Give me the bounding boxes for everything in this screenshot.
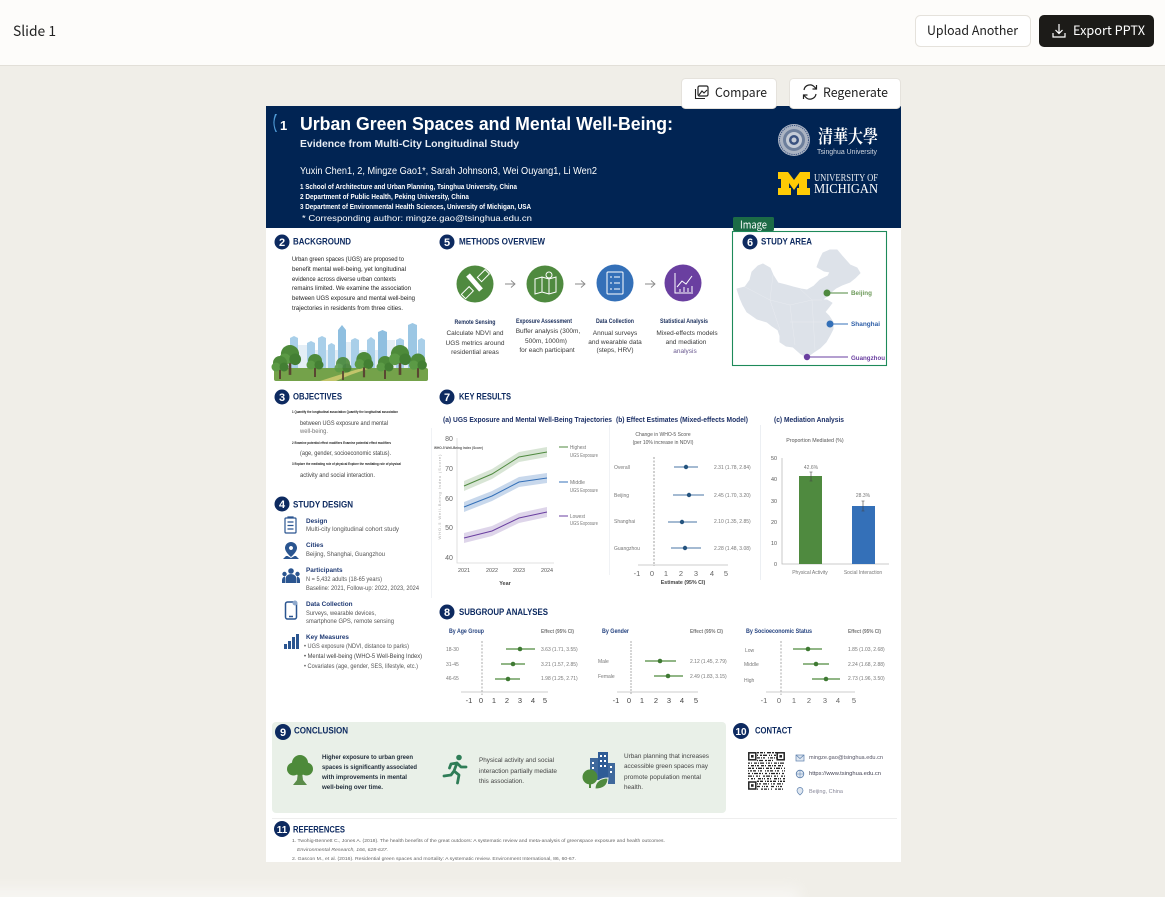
method: statistical analysis: analysis: [673, 348, 697, 355]
method: exposure assessment: Buffer analysis (300m,: [516, 328, 580, 335]
forest plot: by age group: 5: [543, 696, 547, 705]
method: statistical analysis: and mediation: [666, 339, 707, 346]
bar: physical activity: 42.6%: [804, 465, 819, 471]
forest plot: by gender: 2: [654, 696, 658, 705]
logo: Tsinghua University: [778, 123, 878, 156]
middle exposure line: [464, 473, 547, 512]
panel: subgroup analyses: [440, 604, 885, 705]
contact: email: mingze.gao@tsinghua.edu.cn: [809, 755, 883, 761]
forest plot: by age group: By Age Group: [449, 628, 484, 635]
forest plot: by gender: 2.12 (1.45, 2.79): [690, 659, 727, 665]
background text: between UGS exposure and mental well-being: [292, 295, 416, 302]
forest plot: by socioeconomic status: 1: [792, 696, 796, 705]
chart: effect estimates forest plot: 5: [724, 569, 728, 578]
forest plot: by age group: 3.63 (1.71, 3.55): [541, 647, 578, 653]
section 1 badge: 1: [280, 118, 287, 133]
conclusion: mediation: [479, 757, 558, 785]
forest row: Guangzhou: 2.28 (1.48, 3.08): [714, 546, 751, 552]
icon: map: [526, 266, 564, 302]
method: statistical analysis: Mixed-effects models: [656, 330, 718, 337]
forest row: Shanghai: [614, 519, 751, 525]
bar: social interaction: 28.3%: [856, 493, 871, 499]
reference list: 2. Gascon M., et al. (2016). Residential green spaces and mortality: A systematic review. Environment International, 86, 60-67.: [292, 856, 576, 862]
forest plot: by socioeconomic status: Low: [745, 648, 755, 654]
affiliations: [300, 182, 531, 211]
forest plot: by gender: Male: [598, 659, 609, 665]
chart: trajectories line chart: 2022: [486, 568, 498, 574]
chart: mediation bar chart: 0: [774, 562, 777, 568]
bar: social interaction: [844, 493, 882, 576]
participants item: [306, 567, 420, 592]
logo: Tsinghua University: 清華大學: [818, 123, 878, 149]
forest plot: by gender: 3: [667, 696, 671, 705]
objectives list: (age, gender, socioeconomic status).: [300, 450, 391, 457]
forest plot: by socioeconomic status: 0: [777, 696, 781, 705]
chart: effect estimates forest plot: 0: [650, 569, 654, 578]
icon: location pin: [283, 542, 299, 559]
objectives list: 2 Examine potential effect modifiers Examine potential effect modifiers: [292, 441, 391, 445]
forest plot: by age group: 46-65: [446, 676, 459, 682]
title: Urban Green Spaces and Mental Well-Being:: [300, 113, 673, 134]
conclusion: planning: promote population mental: [624, 774, 701, 781]
forest plot: by gender: By Gender: [602, 628, 629, 635]
design item: Design: [306, 518, 327, 525]
forest plot: by socioeconomic status: High: [744, 678, 755, 684]
city: Shanghai: [826, 320, 880, 328]
key measures item: • Covariates (age, gender, SES, lifestyle, etc.): [304, 664, 418, 670]
method: remote sensing: residential areas: [451, 349, 500, 356]
panel: background: [272, 234, 428, 381]
forest plot: by age group: 2: [505, 696, 509, 705]
panel: references: REFERENCES: [293, 824, 345, 836]
panel: methods overview: [440, 234, 718, 356]
method: statistical analysis: Statistical Analysis: [660, 318, 708, 325]
chart: mediation bar chart: Proportion Mediated (%): [786, 438, 844, 444]
chart: trajectories line chart: 2021: [458, 568, 470, 574]
panel: objectives: [274, 390, 401, 479]
legend: Middle: [570, 480, 585, 486]
section 1 badge: [273, 114, 287, 133]
chart: effect estimates forest plot: (b) Effect Estimates (Mixed-effects Model): [616, 417, 748, 424]
forest plot: by age group: 3.21 (1.57, 2.85): [541, 662, 578, 668]
forest plot: by age group: 1: [492, 696, 496, 705]
image tag: Image: [740, 218, 767, 232]
conclusion: planning: accessible green spaces may: [624, 763, 709, 770]
icon: clipboard: [285, 517, 296, 533]
chart: effect estimates forest plot: Change in WHO-5 Score: [635, 432, 691, 438]
conclusion: finding: [321, 754, 417, 791]
cities item: Beijing, Shanghai, Guangzhou: [306, 552, 385, 558]
affiliations: 2 Department of Public Health, Peking University, China: [300, 192, 470, 201]
icon: city and leaf: [582, 752, 615, 789]
chart: effect estimates forest plot: -1: [634, 569, 640, 578]
panel: contact: [733, 723, 883, 795]
city: Guangzhou: [804, 354, 885, 362]
chart: effect estimates forest plot: 1: [664, 569, 668, 578]
background text: evidence across diverse urban contexts: [292, 276, 396, 283]
forest row: overall: [614, 465, 751, 471]
background text: [292, 256, 416, 312]
conclusion: mediation: this association.: [479, 778, 524, 785]
forest plot: by socioeconomic status: 4: [836, 696, 840, 705]
legend: Highest: [570, 445, 587, 451]
chart: mediation bar chart: 20: [771, 520, 777, 526]
objectives list: between UGS exposure and mental: [300, 420, 388, 427]
method: data collection: Data Collection: [596, 318, 634, 325]
forest plot: by socioeconomic status: 2: [807, 696, 811, 705]
forest plot: by age group: -1: [466, 696, 472, 705]
poster: [266, 106, 901, 862]
forest row: Beijing: 2.45 (1.70, 3.20): [714, 493, 751, 499]
legend: Lowest: [570, 514, 586, 520]
compare button: [682, 78, 776, 108]
panel: key results: KEY RESULTS: [459, 392, 511, 402]
conclusion: planning: health.: [624, 784, 643, 791]
background text: Urban green spaces (UGS) are proposed to: [292, 256, 405, 263]
design item: Multi-city longitudinal cohort study: [306, 527, 399, 533]
method: exposure assessment: for each participant: [519, 347, 575, 354]
contact: website: https://www.tsinghua.edu.cn: [809, 771, 881, 777]
icon: runner: [444, 755, 466, 783]
regenerate button: [790, 78, 900, 108]
icon: analysis chart: [664, 264, 702, 302]
chart: mediation bar chart: [760, 417, 889, 580]
panel: subgroup analyses: 8: [444, 607, 450, 619]
highest exposure line: [464, 447, 547, 491]
method: data collection: and wearable data: [588, 339, 642, 346]
chart: mediation bar chart: 40: [771, 477, 777, 483]
panel: study design: STUDY DESIGN: [293, 500, 353, 510]
city: Guangzhou: Guangzhou: [851, 355, 885, 362]
panel: references: [272, 818, 897, 862]
data collection item: smartphone GPS, remote sensing: [306, 619, 394, 625]
forest plot: by gender: Female: [598, 674, 615, 680]
chart: mediation bar chart: 10: [771, 541, 777, 547]
forest row: Beijing: Beijing: [614, 493, 629, 499]
contact: location: [797, 788, 844, 795]
panel: contact: 10: [735, 727, 747, 738]
chart: trajectories line chart: WHO-5 Well-Being Index (Score): [434, 446, 483, 450]
method: remote sensing: Remote Sensing: [454, 319, 496, 326]
participants item: N = 5,432 adults (18-65 years): [306, 577, 382, 583]
forest plot: by socioeconomic status: Effect (95% CI): [848, 629, 881, 635]
panel: study design: [274, 496, 422, 670]
conclusion: planning: [624, 753, 709, 791]
contact: website: [796, 770, 881, 778]
method: data collection: [588, 318, 642, 354]
forest plot: by socioeconomic status: -1: [761, 696, 767, 705]
logo: University of Michigan: [778, 172, 878, 197]
chart: trajectories line chart: [434, 417, 612, 587]
method: data collection: (steps, HRV): [596, 347, 634, 354]
map of China: [737, 250, 860, 357]
panel: conclusion: [272, 722, 726, 813]
forest plot: by age group: 0: [479, 696, 483, 705]
forest row: overall: 2.31 (1.78, 2.84): [714, 465, 751, 471]
icon: smartphone: [286, 600, 298, 619]
affiliations: 3 Department of Environmental Health Sciences, University of Michigan, USA: [300, 202, 531, 211]
objectives list: well-being.: [299, 428, 328, 435]
slide name: Slide 1: [13, 21, 56, 41]
forest plot: by gender: [598, 628, 727, 705]
objectives list: 3 Explore the mediating role of physical Explore the mediating role of physical: [292, 462, 401, 466]
panel: conclusion: 9: [280, 727, 286, 739]
chart: trajectories line chart: (a) UGS Exposure and Mental Well-Being Trajectories: [443, 417, 612, 424]
forest row: Shanghai: 2.10 (1.35, 2.85): [714, 519, 751, 525]
chart: mediation bar chart: 50: [771, 456, 777, 462]
participants item: Baseline: 2021, Follow-up: 2022, 2023, 2024: [306, 586, 420, 592]
forest plot: by age group: 1.98 (1.25, 2.71): [541, 676, 578, 682]
forest plot: by age group: 31-45: [446, 662, 459, 668]
key measures item: • Mental well-being (WHO-5 Well-Being Index): [304, 654, 422, 660]
key measures item: [304, 634, 422, 670]
conclusion: finding: Higher exposure to urban green: [322, 754, 413, 761]
key measures item: Key Measures: [306, 634, 349, 641]
method: data collection: Annual surveys: [593, 330, 638, 337]
chart: trajectories line chart: Year: [499, 581, 512, 587]
method: exposure assessment: Exposure Assessment: [516, 318, 572, 325]
conclusion: finding: with improvements in mental: [321, 774, 407, 781]
panel: objectives: OBJECTIVES: [293, 392, 342, 402]
panel: key results: 7: [444, 392, 450, 404]
panel: background: BACKGROUND: [293, 236, 351, 248]
chart: trajectories line chart: WHO-5 Well-Being Index (Score): [437, 454, 442, 540]
upload button: Upload Another: [927, 20, 1019, 39]
forest plot: by socioeconomic status: 3: [823, 696, 827, 705]
legend: UGS Exposure: [570, 488, 598, 494]
conclusion: finding: spaces is significantly associated: [322, 764, 417, 771]
affiliations: 1 School of Architecture and Urban Planning, Tsinghua University, China: [300, 182, 518, 191]
chart: mediation bar chart: (c) Mediation Analysis: [774, 417, 844, 424]
logo: University of Michigan: MICHIGAN: [814, 182, 878, 197]
legend: UGS Exposure: [570, 521, 598, 527]
bar: physical activity: [792, 465, 828, 576]
method: exposure assessment: 500m, 1000m): [525, 338, 567, 345]
background text: benefit mental well-being, yet longitudinal: [292, 266, 406, 273]
corresponding author: * Corresponding author: mingze.gao@tsinghua.edu.cn: [302, 213, 532, 223]
city: Beijing: [824, 290, 872, 297]
panel: study design: 4: [279, 499, 286, 511]
export button: Export PPTX: [1073, 20, 1146, 39]
participants item: Participants: [306, 567, 343, 574]
subtitle: Evidence from Multi-City Longitudinal Study: [300, 138, 519, 150]
conclusion: mediation: interaction partially mediate: [479, 768, 558, 775]
objectives list: activity and social interaction.: [300, 472, 375, 479]
city: Shanghai: Shanghai: [851, 321, 880, 328]
objectives list: [292, 410, 401, 479]
forest plot: by socioeconomic status: 2.24 (1.68, 2.88): [848, 662, 885, 668]
forest plot: by gender: 2.49 (1.83, 3.15): [690, 674, 727, 680]
conclusion: mediation: Physical activity and social: [479, 757, 554, 764]
logo: University of Michigan: UNIVERSITY OF: [814, 173, 878, 184]
icon: tree: [287, 755, 313, 785]
chart: trajectories line chart: 50: [445, 525, 453, 532]
forest plot: by gender: -1: [613, 696, 619, 705]
authors: Yuxin Chen1, 2, Mingze Gao1*, Sarah Johnson3, Wei Ouyang1, Li Wen2: [300, 165, 597, 177]
chart: effect estimates forest plot: 3: [694, 569, 698, 578]
forest row: Guangzhou: [614, 546, 751, 552]
chart: trajectories line chart: 70: [445, 466, 453, 473]
city: Beijing: Beijing: [851, 290, 872, 297]
icon: bars: [284, 634, 299, 649]
chart: trajectories line chart: 80: [445, 436, 453, 443]
reference list: Environmental Research, 166, 628-637.: [297, 847, 388, 853]
chart: effect estimates forest plot: [614, 417, 751, 586]
bar: social interaction: Social Interaction: [844, 570, 882, 576]
design item: [306, 518, 399, 533]
conclusion: finding: well-being over time.: [321, 784, 383, 791]
chart: mediation bar chart: 30: [771, 499, 777, 505]
icon: satellite: [456, 266, 494, 302]
reference list: 1. Twohig-Bennett C., Jones A. (2018). The health benefits of the great outdoors: A systematic review and meta-analysis of greenspace exposure and health outcomes.: [292, 838, 665, 844]
arrows: [505, 280, 655, 288]
panel: objectives: 3: [279, 392, 285, 404]
icon: checklist: [596, 264, 634, 302]
data collection item: [306, 601, 394, 625]
forest row: Beijing: [614, 493, 751, 499]
data collection item: Data Collection: [306, 601, 353, 608]
method: remote sensing: Calculate NDVI and: [446, 330, 504, 337]
icon: people: [282, 568, 300, 583]
forest plot: by socioeconomic status: [744, 628, 885, 705]
top bar: [0, 0, 1165, 66]
panel: conclusion: CONCLUSION: [294, 726, 348, 736]
forest plot: by gender: 5: [694, 696, 698, 705]
upload button: [916, 16, 1030, 46]
forest plot: by age group: Effect (95% CI): [541, 629, 574, 635]
QR code: [748, 753, 785, 789]
forest plot: by gender: 1: [640, 696, 644, 705]
panel: study area: [732, 217, 886, 366]
method: remote sensing: UGS metrics around: [446, 340, 505, 347]
forest plot: by age group: 18-30: [446, 647, 459, 653]
export button: [1039, 15, 1154, 47]
panel: references: 11: [277, 825, 288, 836]
chart: trajectories line chart: 2024: [541, 568, 553, 574]
header band: [266, 106, 901, 228]
background text: trajectories in residents from three cities.: [292, 305, 403, 312]
forest plot: by socioeconomic status: Middle: [744, 662, 759, 668]
data collection item: Surveys, wearable devices,: [306, 611, 376, 617]
illustration: city park: [272, 323, 428, 381]
chart: trajectories line chart: 40: [445, 555, 453, 562]
panel: key results: [432, 390, 889, 598]
chart: effect estimates forest plot: (per 10% increase in NDVI): [633, 440, 694, 446]
legend: [559, 445, 598, 527]
lowest exposure line: [464, 507, 547, 543]
cities item: Cities: [306, 542, 324, 549]
compare button: Compare: [715, 82, 767, 101]
forest plot: by gender: 4: [680, 696, 684, 705]
method: statistical analysis: [656, 318, 718, 355]
forest plot: by gender: Effect (95% CI): [690, 629, 723, 635]
objectives list: 1 Quantify the longitudinal association Quantify the longitudinal association: [292, 410, 399, 414]
forest plot: by gender: 0: [627, 696, 631, 705]
forest plot: by age group: [446, 628, 578, 705]
legend: UGS Exposure: [570, 453, 598, 459]
forest plot: by age group: 3: [518, 696, 522, 705]
selection frame: [732, 232, 886, 366]
forest row: overall: Overall: [614, 465, 630, 471]
panel: methods overview: 5: [444, 237, 450, 249]
cities item: [306, 542, 385, 558]
reference list: [292, 838, 665, 862]
panel: contact: CONTACT: [755, 726, 792, 736]
forest row: Guangzhou: Guangzhou: [614, 546, 640, 552]
key measures item: • UGS exposure (NDVI, distance to parks): [304, 644, 409, 650]
logo: Tsinghua University: Tsinghua University: [817, 149, 877, 156]
forest plot: by socioeconomic status: 5: [852, 696, 856, 705]
panel: study area: STUDY AREA: [761, 236, 812, 248]
panel: study area: 6: [747, 237, 753, 249]
forest plot: by age group: 4: [531, 696, 535, 705]
panel: subgroup analyses: SUBGROUP ANALYSES: [459, 607, 548, 618]
method: exposure assessment: [516, 318, 580, 354]
bar: physical activity: Physical Activity: [792, 570, 828, 576]
chart: trajectories line chart: 60: [445, 496, 453, 503]
chart: trajectories line chart: 2023: [513, 568, 525, 574]
contact: location: Beijing, China: [809, 789, 844, 795]
chart: effect estimates forest plot: 4: [710, 569, 714, 578]
forest row: Shanghai: Shanghai: [614, 519, 635, 525]
panel: methods overview: METHODS OVERVIEW: [459, 236, 545, 248]
method: remote sensing: [446, 319, 505, 356]
chart: effect estimates forest plot: 2: [679, 569, 683, 578]
background text: remains limited. We examine the association: [292, 285, 412, 292]
conclusion: planning: Urban planning that increases: [624, 753, 709, 760]
forest plot: by socioeconomic status: 2.73 (1.96, 3.50): [848, 676, 885, 682]
forest plot: by socioeconomic status: By Socioeconomic Status: [746, 628, 812, 635]
forest plot: by socioeconomic status: 1.85 (1.03, 2.68): [848, 647, 885, 653]
panel: background: 2: [279, 237, 285, 249]
regenerate button: Regenerate: [823, 82, 888, 101]
chart: effect estimates forest plot: Estimate (95% CI): [661, 580, 705, 586]
